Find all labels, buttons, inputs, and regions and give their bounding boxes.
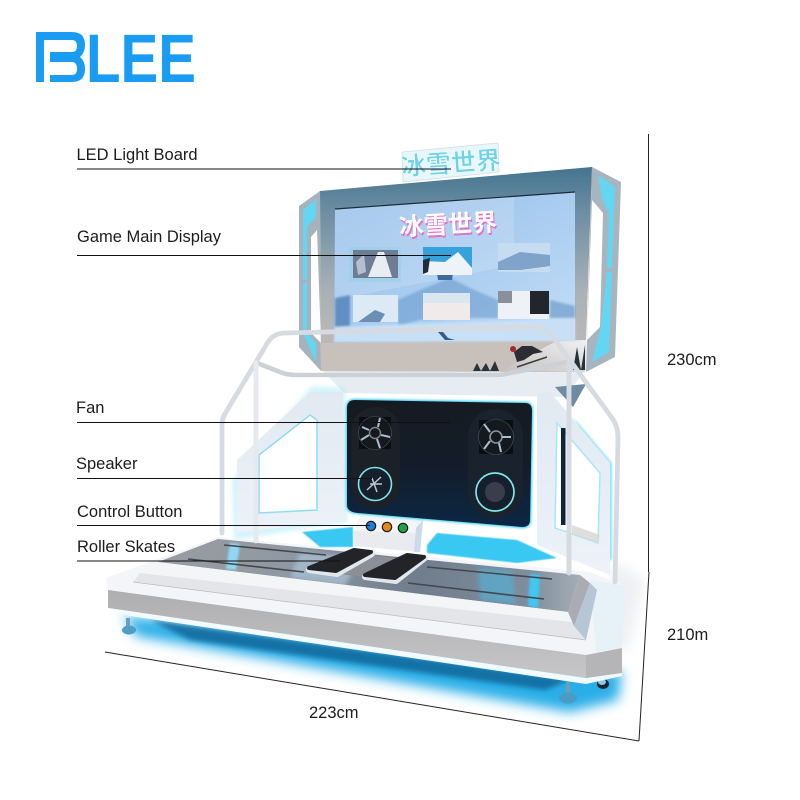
game thumbnail 4 (353, 295, 398, 322)
dimension: depth: 210m (667, 626, 708, 644)
right corner plates (568, 575, 590, 626)
game thumbnail 3 (498, 243, 550, 272)
control button box (354, 516, 423, 552)
wordmark: LEE (86, 20, 196, 97)
left fan (358, 416, 392, 450)
dimension: height: 230cm (667, 351, 717, 369)
right speaker (476, 473, 514, 511)
plate light reflections (226, 543, 540, 608)
label: Control Button: Control Button (77, 503, 182, 521)
icon: stylised B monogram (36, 32, 85, 82)
safety rail (222, 327, 618, 582)
foot: left (122, 618, 136, 634)
green button (398, 523, 408, 533)
label: Fan: Fan (76, 399, 104, 417)
blue floor glow (124, 616, 622, 712)
dimension: depth (639, 572, 708, 741)
game thumbnail 6 (498, 291, 549, 319)
raised grey strip (133, 573, 586, 640)
left pod (351, 407, 400, 508)
cyan floor lights (302, 527, 353, 547)
game thumbnail 1 (349, 247, 401, 282)
back structure upper band (320, 368, 587, 397)
game title: 冰雪世界 (398, 208, 498, 242)
metal tread plate (158, 539, 580, 612)
game screen (334, 192, 575, 342)
LED strip (108, 608, 622, 684)
display frame (320, 167, 592, 372)
outer arch rail (222, 327, 618, 582)
left skate pedal (309, 550, 372, 574)
logo: BLEE (36, 20, 196, 97)
left post (254, 363, 258, 541)
game thumbnail 5 (423, 293, 470, 320)
box between pedals (338, 556, 395, 577)
dark support bracket (555, 384, 586, 407)
label: Speaker: Speaker (76, 455, 138, 473)
label: Roller Skates: Roller Skates (77, 538, 175, 556)
right post (566, 362, 572, 573)
foot: right (559, 682, 577, 704)
label: Game Main Display: Game Main Display (77, 228, 222, 246)
blue button (366, 521, 376, 531)
base deck (106, 527, 625, 684)
label: LED Light Board: LED Light Board (76, 146, 198, 164)
dimension: width: 223cm (309, 704, 359, 722)
left side panel (232, 386, 347, 540)
left speaker (358, 468, 392, 500)
skier on screen (437, 267, 455, 340)
right skate pedal (365, 555, 425, 581)
left wing (299, 191, 321, 371)
machine illustration (106, 143, 645, 712)
LED light board: 冰雪世界 (400, 147, 502, 181)
orange button (382, 522, 392, 532)
game thumbnail 2 (423, 247, 472, 275)
display assembly (299, 143, 621, 372)
dimension: width (105, 652, 639, 741)
skate rails (188, 545, 552, 599)
mountain backdrop (334, 278, 575, 342)
right side panel (537, 392, 612, 575)
transparent right side (590, 580, 625, 652)
caster wheel (597, 679, 609, 689)
right fan (478, 420, 514, 454)
right pod (468, 409, 523, 518)
inner handle rail (257, 362, 568, 375)
black speaker panel (347, 400, 532, 527)
right wing (586, 167, 621, 372)
soft floor shadow at right (612, 560, 645, 650)
grey front face (108, 590, 586, 678)
lower printed panel (321, 340, 586, 372)
game title: 冰雪世界 (399, 210, 499, 243)
